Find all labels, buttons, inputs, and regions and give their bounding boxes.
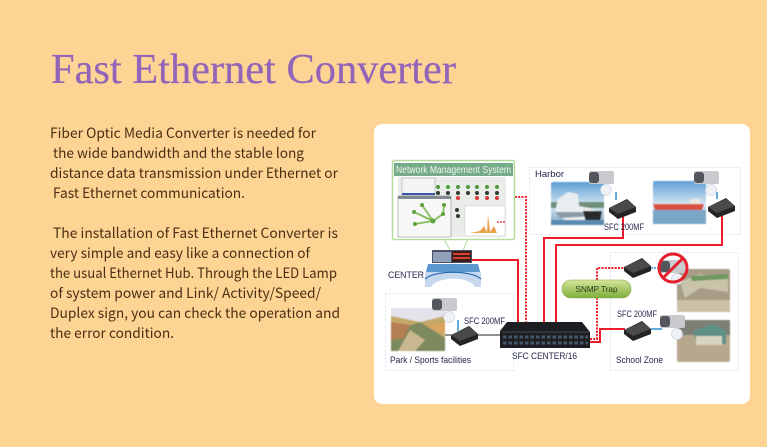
text block: installation paragraph: the usual Ethernet Hub. Through the LED Lamp: [50, 263, 337, 283]
icon: school converter 1: [624, 258, 651, 278]
icon: school converter 2: [624, 321, 651, 341]
connection lines: blue camera links: [458, 192, 717, 331]
zone: Harbor: [530, 168, 740, 234]
text block: installation paragraph: [50, 223, 340, 343]
icon: center building: [425, 250, 481, 287]
icon: harbor converter 2: [708, 198, 735, 218]
connection line: black park link: [445, 334, 500, 336]
text block: installation paragraph: very simple and easy like a connection of: [50, 243, 310, 263]
text block: installation paragraph: the error condition.: [50, 323, 174, 343]
text block: intro paragraph: distance data transmission under Ethernet or: [50, 163, 339, 183]
zone: School Zone: School Zone: [616, 355, 663, 365]
photo: school building: [677, 269, 730, 312]
icon: park converter: [451, 326, 478, 346]
icon: harbor camera 1: [589, 171, 614, 196]
photo: park: [391, 308, 445, 351]
connection lines: dotted red: [505, 197, 625, 339]
icon: disabled camera: [659, 254, 687, 284]
text block: installation paragraph: Duplex sign, you can check the operation and: [50, 303, 340, 323]
label: SFC CENTER/16: SFC CENTER/16: [512, 351, 577, 361]
icon: school camera: [660, 315, 685, 340]
photo: harbor ship: [551, 182, 604, 225]
text block: intro paragraph: [50, 123, 339, 203]
connector: NMS to center: [444, 239, 468, 250]
connection lines: solid red: [472, 216, 722, 342]
text block: intro paragraph: Fast Ethernet communication.: [53, 183, 245, 203]
text block: installation paragraph: The installation of Fast Ethernet Converter is: [53, 223, 338, 243]
label: CENTER: CENTER: [388, 270, 424, 280]
text block: intro paragraph: the wide bandwidth and the stable long: [53, 143, 304, 163]
text block: intro paragraph: Fiber Optic Media Converter is needed for: [50, 123, 317, 143]
panel: Network Management System: Network Management System: [396, 165, 511, 176]
label: SFC 200MF park: SFC 200MF: [464, 316, 506, 326]
badge: SNMP Trap: SNMP Trap: [576, 284, 618, 294]
title: Fast Ethernet Converter: [51, 47, 456, 93]
icon: SFC CENTER/16 rack: [500, 322, 590, 348]
screenshot: [398, 177, 506, 237]
label: SFC 200MF harbor: SFC 200MF: [604, 222, 645, 232]
icon: park camera: [432, 298, 457, 322]
icon: harbor camera 2: [694, 171, 719, 196]
photo: red tanker: [653, 181, 706, 224]
badge: SNMP Trap: [562, 280, 631, 298]
panel: network diagram: [374, 124, 750, 404]
zone: Park / Sports facilities: [386, 294, 514, 370]
photo: school yard: [677, 320, 730, 362]
zone: School Zone: [610, 252, 738, 370]
panel: Network Management System: [392, 160, 514, 240]
label: SFC 200MF school: SFC 200MF: [617, 309, 658, 319]
zone: Harbor: Harbor: [535, 169, 564, 180]
text block: installation paragraph: of system power and Link/ Activity/Speed/: [50, 283, 321, 303]
icon: harbor converter 1: [609, 199, 636, 219]
zone: Park / Sports facilities: Park / Sports facilities: [390, 355, 472, 365]
